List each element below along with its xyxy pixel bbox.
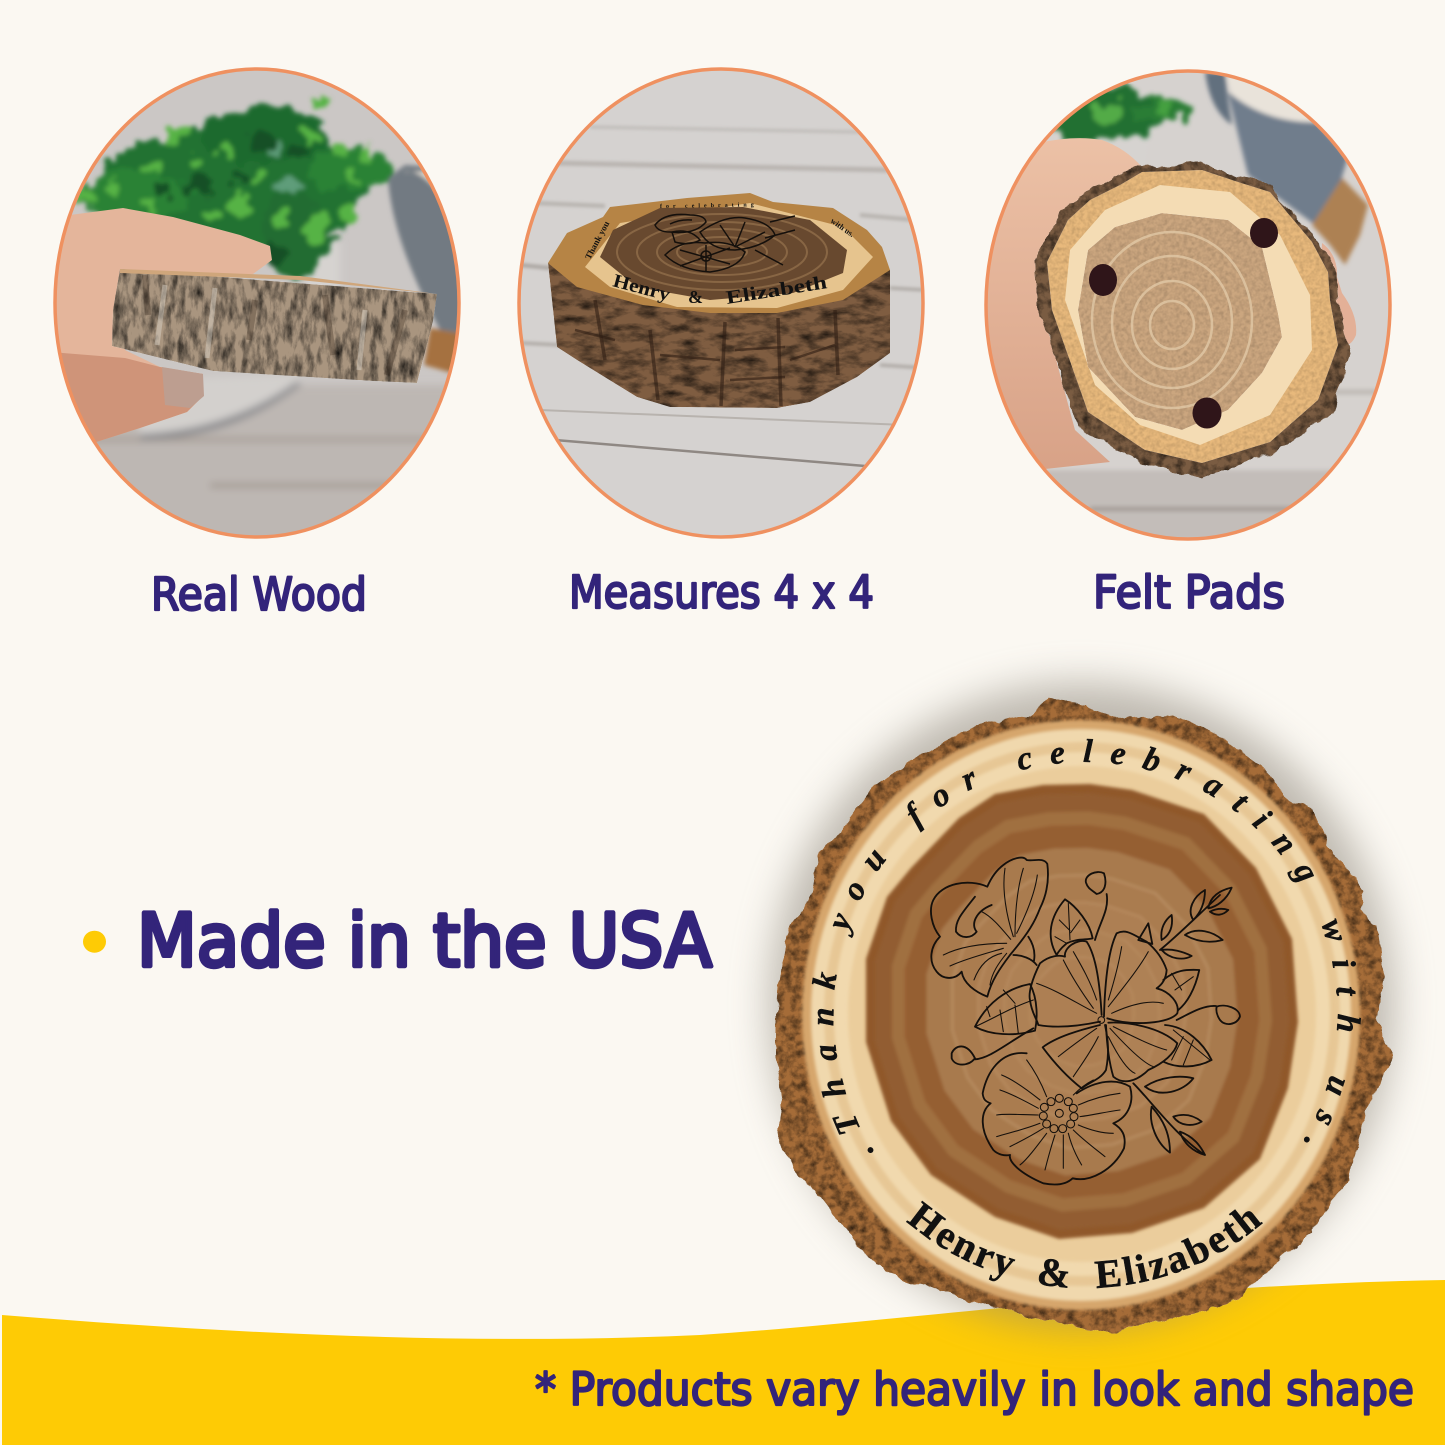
engraved mini text: & <box>688 287 703 307</box>
engraved mini text: Henry <box>611 271 673 306</box>
engraved mini text: with us. <box>829 216 856 239</box>
hibiscus top left <box>931 858 1048 997</box>
hand <box>980 138 1142 469</box>
orange border <box>986 71 1390 539</box>
yellow footer wave <box>2 1280 1445 1445</box>
side leaves <box>975 984 1037 1034</box>
sprigs <box>1138 888 1232 959</box>
engraved mini text: Thank you <box>583 219 611 261</box>
bud top <box>1086 872 1107 940</box>
wood slice side <box>112 269 437 383</box>
bottom poppy <box>983 1053 1131 1184</box>
caption: real wood: Real Wood <box>151 568 367 621</box>
coaster heartwood <box>1078 213 1282 430</box>
panel: felt pads photo <box>980 65 1395 545</box>
curved message: .Thank you for celebrating with us. <box>812 738 1361 1153</box>
floral engraving <box>931 858 1240 1184</box>
bullet dot <box>83 931 106 953</box>
coaster bark <box>1035 162 1352 478</box>
sapwood ring <box>802 720 1360 1310</box>
buds <box>1177 1006 1240 1024</box>
centre hibiscus <box>1030 932 1178 1088</box>
panel: real wood photo <box>45 65 470 545</box>
engraved mini text: Elizabeth <box>724 272 829 309</box>
mug <box>1228 93 1348 225</box>
growth rings <box>875 793 1289 1230</box>
curved names: Henry & Elizabeth <box>906 1200 1263 1288</box>
engraved mini text: for celebrating <box>660 202 758 210</box>
orange border <box>519 69 923 537</box>
coaster top face <box>548 193 890 313</box>
caption: felt pads: Felt Pads <box>1093 566 1285 619</box>
panel: measures photo <box>515 65 930 545</box>
hand <box>45 205 272 444</box>
coaster shadow <box>770 683 1394 1327</box>
heartwood <box>866 784 1298 1239</box>
coaster bark side <box>548 263 890 408</box>
engraved mini text <box>583 202 856 309</box>
plant foliage <box>80 92 395 275</box>
mug <box>386 162 458 375</box>
large engraved coaster <box>748 662 1416 1348</box>
bark edge <box>776 698 1392 1333</box>
plant foliage <box>1045 89 1190 141</box>
felt pads <box>1089 264 1117 296</box>
orange border <box>55 69 459 537</box>
engraved mini bouquet <box>655 214 795 272</box>
footer note: * Products vary heavily in look and shape <box>535 1363 1414 1416</box>
coaster back <box>1047 170 1338 463</box>
caption: measures: Measures 4 x 4 <box>569 566 874 619</box>
heading: made in the USA: Made in the USA <box>137 899 712 984</box>
leaf upper <box>1051 899 1093 955</box>
